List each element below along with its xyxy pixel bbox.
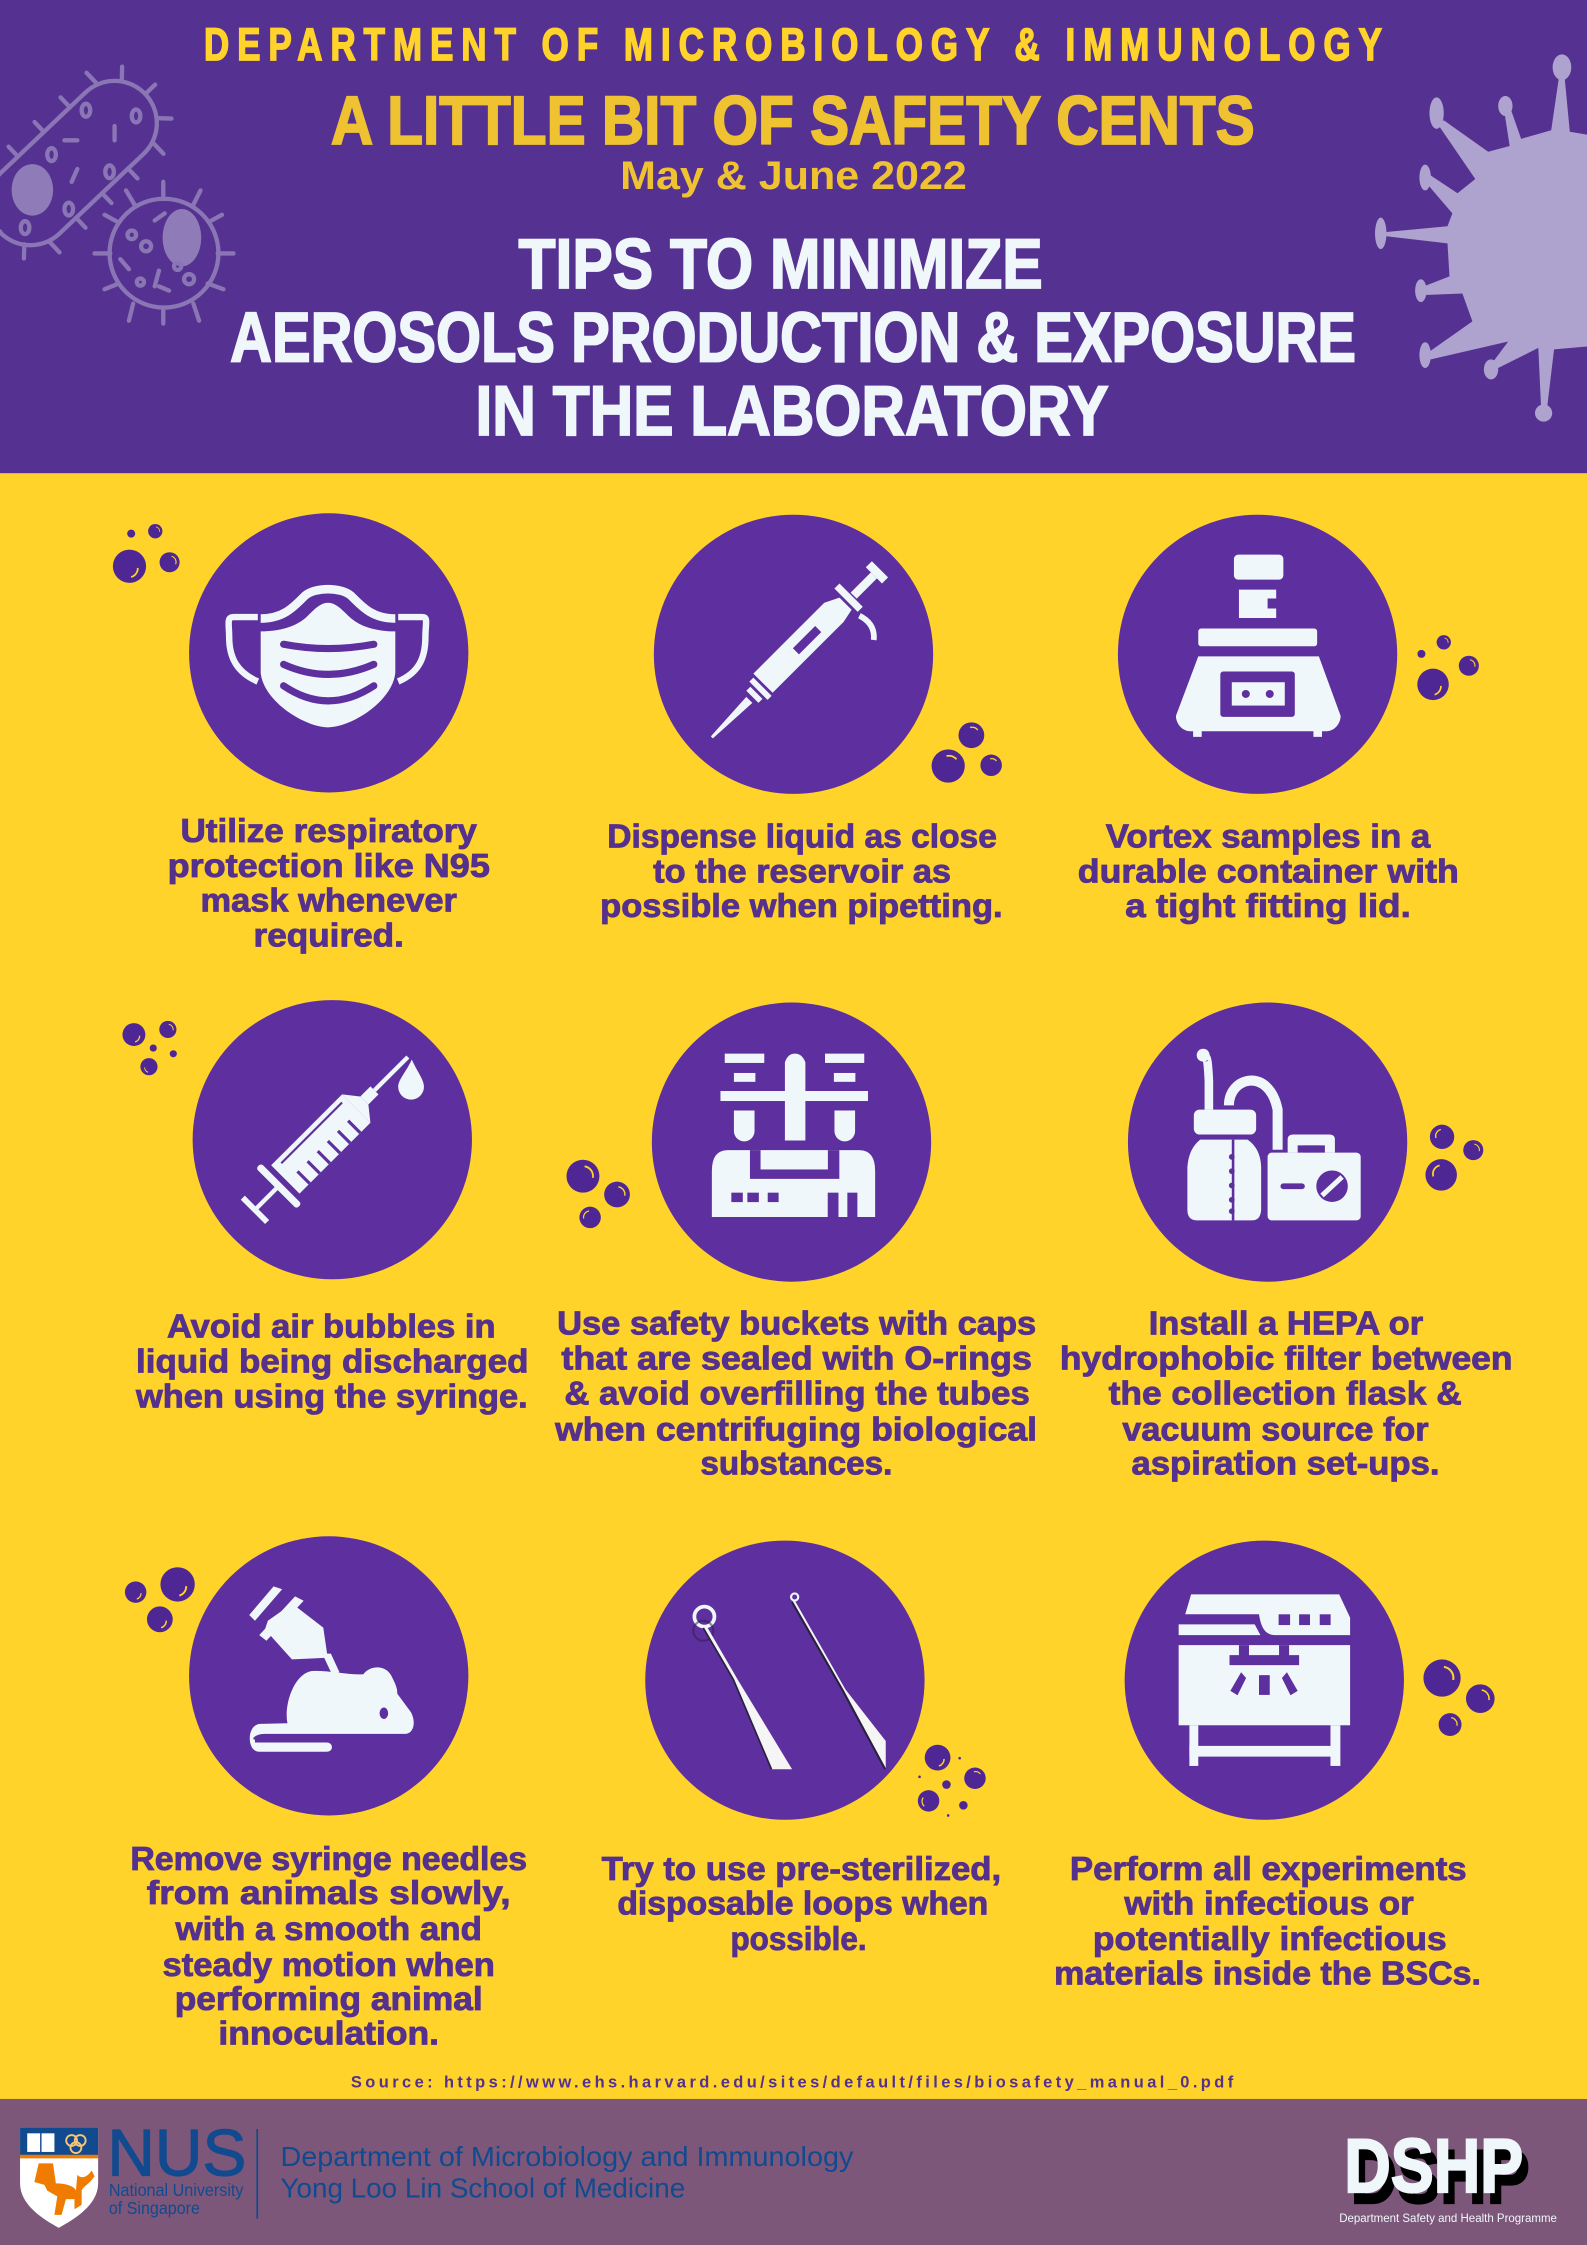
heading: main title: [230, 224, 1356, 450]
heading: newsletter title: A LITTLE BIT OF SAFETY CENTS: [331, 82, 1255, 159]
icon: vortex mixer: [1118, 515, 1397, 794]
department name: [280, 2141, 853, 2204]
text: to the reservoir as: [653, 853, 951, 890]
text: possible.: [730, 1920, 867, 1957]
bubbles: [566, 1160, 630, 1228]
icon: aspiration flask and pump: [1128, 1003, 1407, 1282]
logo: NUS wordmark: of Singapore: [109, 2198, 200, 2218]
text: disposable loops when: [617, 1884, 988, 1921]
department name: Department of Microbiology and Immunology: [280, 2141, 853, 2172]
department name: Yong Loo Lin School of Medicine: [280, 2173, 685, 2204]
text: Dispense liquid as close: [607, 818, 997, 855]
header panel: [0, 0, 1587, 473]
heading: main title: IN THE LABORATORY: [476, 371, 1109, 450]
text: aspiration set-ups.: [1132, 1445, 1439, 1482]
text: Remove syringe needles: [130, 1840, 527, 1877]
text: liquid being discharged: [136, 1343, 529, 1380]
footer panel: [0, 2099, 1587, 2245]
icon: pipette: [654, 515, 933, 794]
text: that are sealed with O-rings: [561, 1339, 1032, 1376]
icon: syringe into mouse: [189, 1536, 468, 1815]
logo: NUS wordmark: [107, 2115, 258, 2219]
text: Avoid air bubbles in: [167, 1307, 496, 1344]
text: required.: [254, 916, 404, 953]
logo: NUS wordmark: NUS: [107, 2115, 246, 2189]
bubbles: [932, 722, 1002, 783]
bubbles: [125, 1567, 195, 1632]
panel: tip 8 loops: [602, 1541, 1001, 1957]
panel: tip 5 centrifuge: [554, 1003, 1037, 1482]
text: Use safety buckets with caps: [557, 1304, 1036, 1341]
text: mask whenever: [201, 881, 457, 918]
text: [135, 1307, 529, 1414]
text: durable container with: [1078, 853, 1459, 890]
heading: main title: AEROSOLS PRODUCTION & EXPOSURE: [230, 298, 1356, 377]
text: [1060, 1304, 1513, 1482]
text: Vortex samples in a: [1106, 818, 1431, 855]
panel: tip 3 vortex: [1078, 515, 1479, 924]
text: & avoid overfilling the tubes: [564, 1375, 1030, 1412]
bubbles: [1417, 635, 1479, 700]
text: [600, 818, 1003, 924]
icon: inoculation loops: [645, 1541, 925, 1820]
text: substances.: [700, 1445, 892, 1482]
text: Perform all experiments: [1070, 1850, 1467, 1887]
text: possible when pipetting.: [600, 887, 1003, 924]
heading: main title: TIPS TO MINIMIZE: [518, 224, 1043, 303]
panel: tip 1 respiratory protection: [113, 513, 490, 953]
logo: DSHP: Department Safety and Health Programme: [1339, 2211, 1557, 2225]
heading: department: DEPARTMENT OF MICROBIOLOGY & IMMUNOLOGY: [204, 18, 1382, 70]
text: when centrifuging biological: [554, 1410, 1037, 1447]
icon: rod bacterium: [0, 44, 194, 282]
logo: DSHP: DSHP: [1351, 2135, 1530, 2220]
bubbles: [1423, 1659, 1495, 1736]
bubbles: [1425, 1125, 1483, 1191]
icon: biosafety cabinet: [1125, 1541, 1404, 1820]
text: [554, 1304, 1037, 1482]
text: [1054, 1850, 1481, 1991]
text: materials inside the BSCs.: [1054, 1954, 1481, 1991]
text: protection like N95: [168, 847, 490, 884]
text: performing animal: [175, 1980, 483, 2017]
panel: tip 9 biosafety cabinet: [1054, 1541, 1495, 1991]
logo: NUS wordmark: National University: [109, 2180, 244, 2200]
text: [130, 1840, 527, 2052]
text: from animals slowly,: [147, 1874, 511, 1911]
bubbles: [122, 1021, 177, 1075]
icon: centrifuge: [652, 1003, 931, 1282]
text: Install a HEPA or: [1149, 1304, 1423, 1341]
text: hydrophobic filter between: [1060, 1339, 1513, 1376]
text: innoculation.: [218, 2015, 439, 2052]
icon: round bacterium: [95, 182, 233, 324]
text: [602, 1850, 1001, 1957]
text: when using the syringe.: [135, 1377, 528, 1414]
text: vacuum source for: [1122, 1410, 1429, 1447]
text: a tight fitting lid.: [1125, 887, 1411, 924]
icon: virus: [1375, 54, 1587, 422]
text: with a smooth and: [174, 1910, 482, 1947]
heading: date: May & June 2022: [620, 154, 967, 198]
source citation: Source: https://www.ehs.harvard.edu/sites/default/files/biosafety_manual_0.pdf: [351, 2074, 1234, 2092]
text: steady motion when: [163, 1946, 495, 1983]
bubbles: [113, 524, 180, 583]
text: Utilize respiratory: [180, 812, 478, 849]
text: [1078, 818, 1459, 924]
text: the collection flask &: [1109, 1375, 1462, 1412]
panel: tip 2 pipetting: [600, 515, 1003, 924]
text: with infectious or: [1123, 1884, 1414, 1921]
logo: NUS crest: [20, 2128, 98, 2228]
text: [168, 812, 490, 953]
icon: mask: [189, 513, 468, 792]
bubbles: [918, 1745, 986, 1817]
panel: tip 7 animal inoculation: [125, 1536, 527, 2052]
icon: syringe with droplet: [193, 1000, 472, 1279]
panel: tip 6 filter: [1060, 1003, 1513, 1482]
logo: DSHP: DSHP: [1344, 2124, 1523, 2209]
panel: tip 4 syringe: [122, 1000, 529, 1414]
text: Try to use pre-sterilized,: [602, 1850, 1001, 1887]
text: potentially infectious: [1093, 1920, 1447, 1957]
